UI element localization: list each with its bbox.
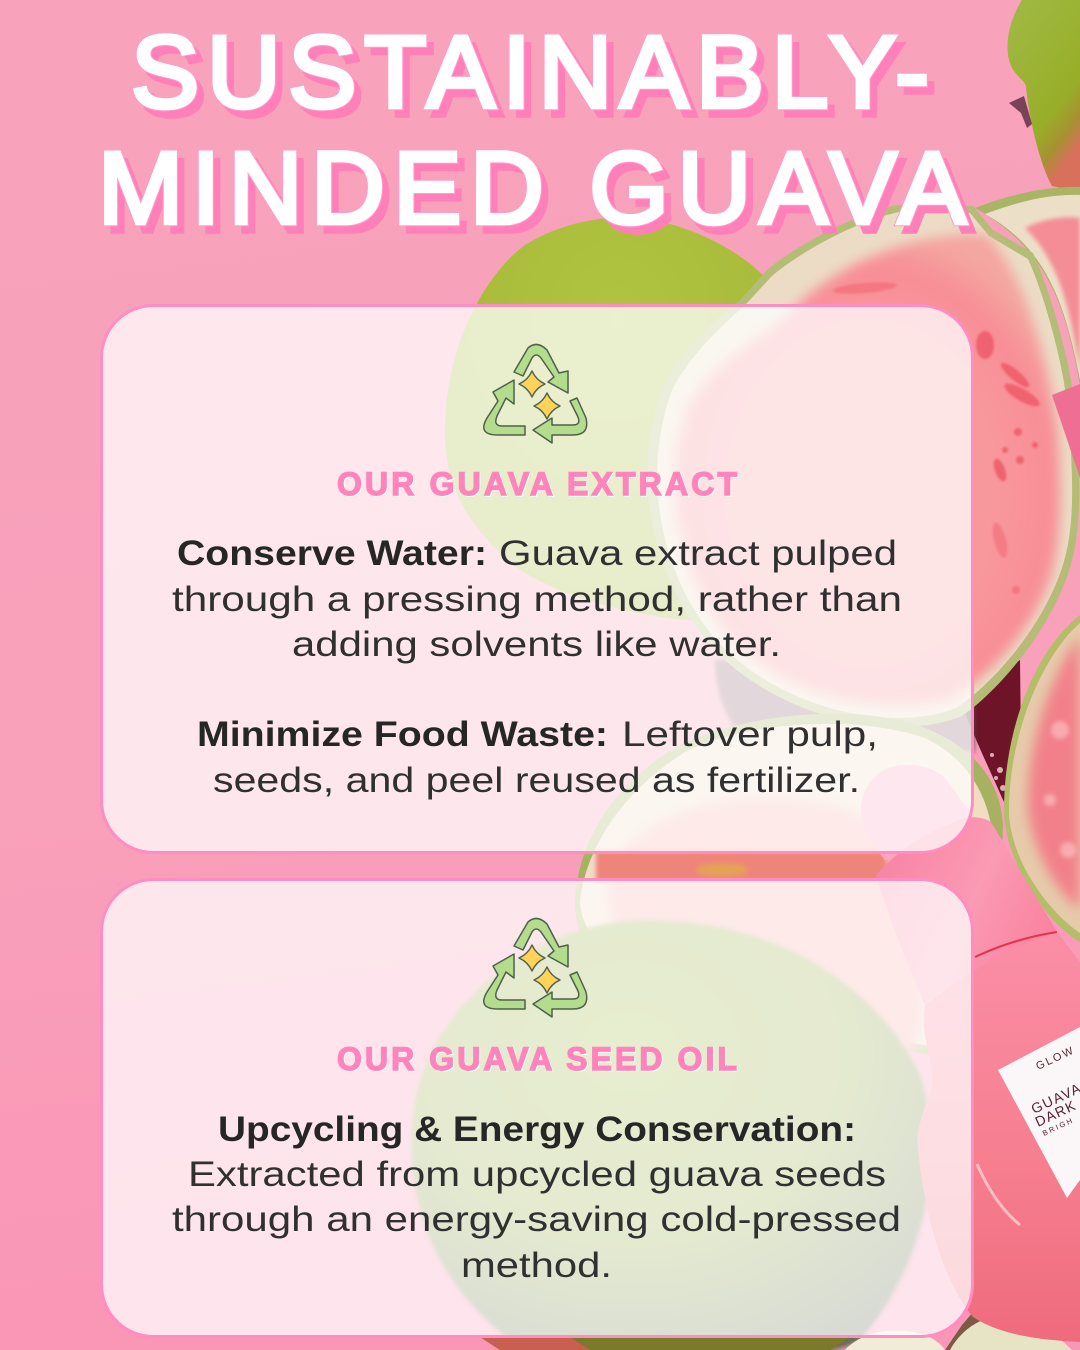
text: conserve water: Conserve Water: <box>177 534 487 573</box>
text: minimize food waste <box>197 715 878 800</box>
heading: our guava extract: OUR GUAVA EXTRACT <box>337 466 737 502</box>
text: upcycling and energy conservation <box>172 1110 901 1285</box>
text: minimize food waste: Leftover pulp, <box>622 715 878 754</box>
fruit: top right whole guava <box>1007 0 1080 192</box>
icon: recycling arrows with sparkles <box>484 344 587 443</box>
fruit: large cut guava <box>647 205 1079 727</box>
fruit: shadow under cut guava <box>715 660 975 752</box>
photo: guava fruits and serum bottle <box>412 0 1080 1350</box>
text: minimize food waste: Minimize Food Waste: <box>197 715 608 754</box>
text: conserve water <box>172 534 902 664</box>
text: upcycling and energy conservation: Extracted from upcycled guava seeds <box>188 1155 886 1194</box>
flesh speckles <box>833 280 1042 594</box>
panel 1 background <box>102 306 972 852</box>
title shadow <box>105 23 973 253</box>
text: conserve water: through a pressing method, rather than <box>172 580 902 619</box>
small pink cap behind fruit <box>1052 384 1080 478</box>
fruit: dark red fruit behind <box>960 660 1022 830</box>
title white text: MINDED GUAVA <box>98 131 966 245</box>
bottle tip <box>861 765 972 860</box>
bottle label: GLOW <box>1034 1044 1077 1073</box>
title outline: MINDED GUAVA <box>98 131 966 245</box>
title white text: SUSTAINABLY- <box>131 15 929 129</box>
bottle body <box>917 932 1080 1342</box>
panel 2 background <box>102 880 972 1336</box>
bottle label <box>998 1027 1080 1198</box>
title outline <box>98 15 966 245</box>
heading: our guava seed oil: OUR GUAVA SEED OIL <box>337 1041 737 1077</box>
serum bottle <box>861 765 1080 1342</box>
icon: recycling arrows with sparkles <box>484 918 587 1017</box>
title shadow: SUSTAINABLY- <box>138 23 936 137</box>
fruit: bottom slices <box>480 1298 1072 1350</box>
title shadow: MINDED GUAVA <box>105 139 973 253</box>
text: conserve water: adding solvents like water. <box>292 625 781 664</box>
fruit: lower cut guava <box>575 714 1003 1080</box>
text: upcycling and energy conservation: method. <box>461 1246 612 1285</box>
bottle label: DARK <box>1033 1097 1079 1130</box>
panel: our guava extract <box>102 306 972 852</box>
fruit: right slice <box>1004 615 1080 942</box>
title outline: SUSTAINABLY- <box>131 15 929 129</box>
title white text <box>98 15 966 245</box>
text: conserve water: Guava extract pulped <box>499 534 897 573</box>
text: minimize food waste: seeds, and peel reused as fertilizer. <box>213 761 860 800</box>
fruit: left whole guava <box>445 218 790 621</box>
fruit: big whole guava <box>412 920 931 1350</box>
bottle label: BRIGH <box>1041 1115 1075 1138</box>
text: upcycling and energy conservation: Upcycling & Energy Conservation: <box>218 1110 856 1149</box>
panel: our guava seed oil <box>102 880 972 1336</box>
text: upcycling and energy conservation: through an energy-saving cold-pressed <box>172 1200 901 1239</box>
title: SUSTAINABLY-MINDED GUAVA <box>98 15 973 253</box>
fruit: top right slice <box>975 187 1080 385</box>
bottle neck <box>876 817 1057 1005</box>
